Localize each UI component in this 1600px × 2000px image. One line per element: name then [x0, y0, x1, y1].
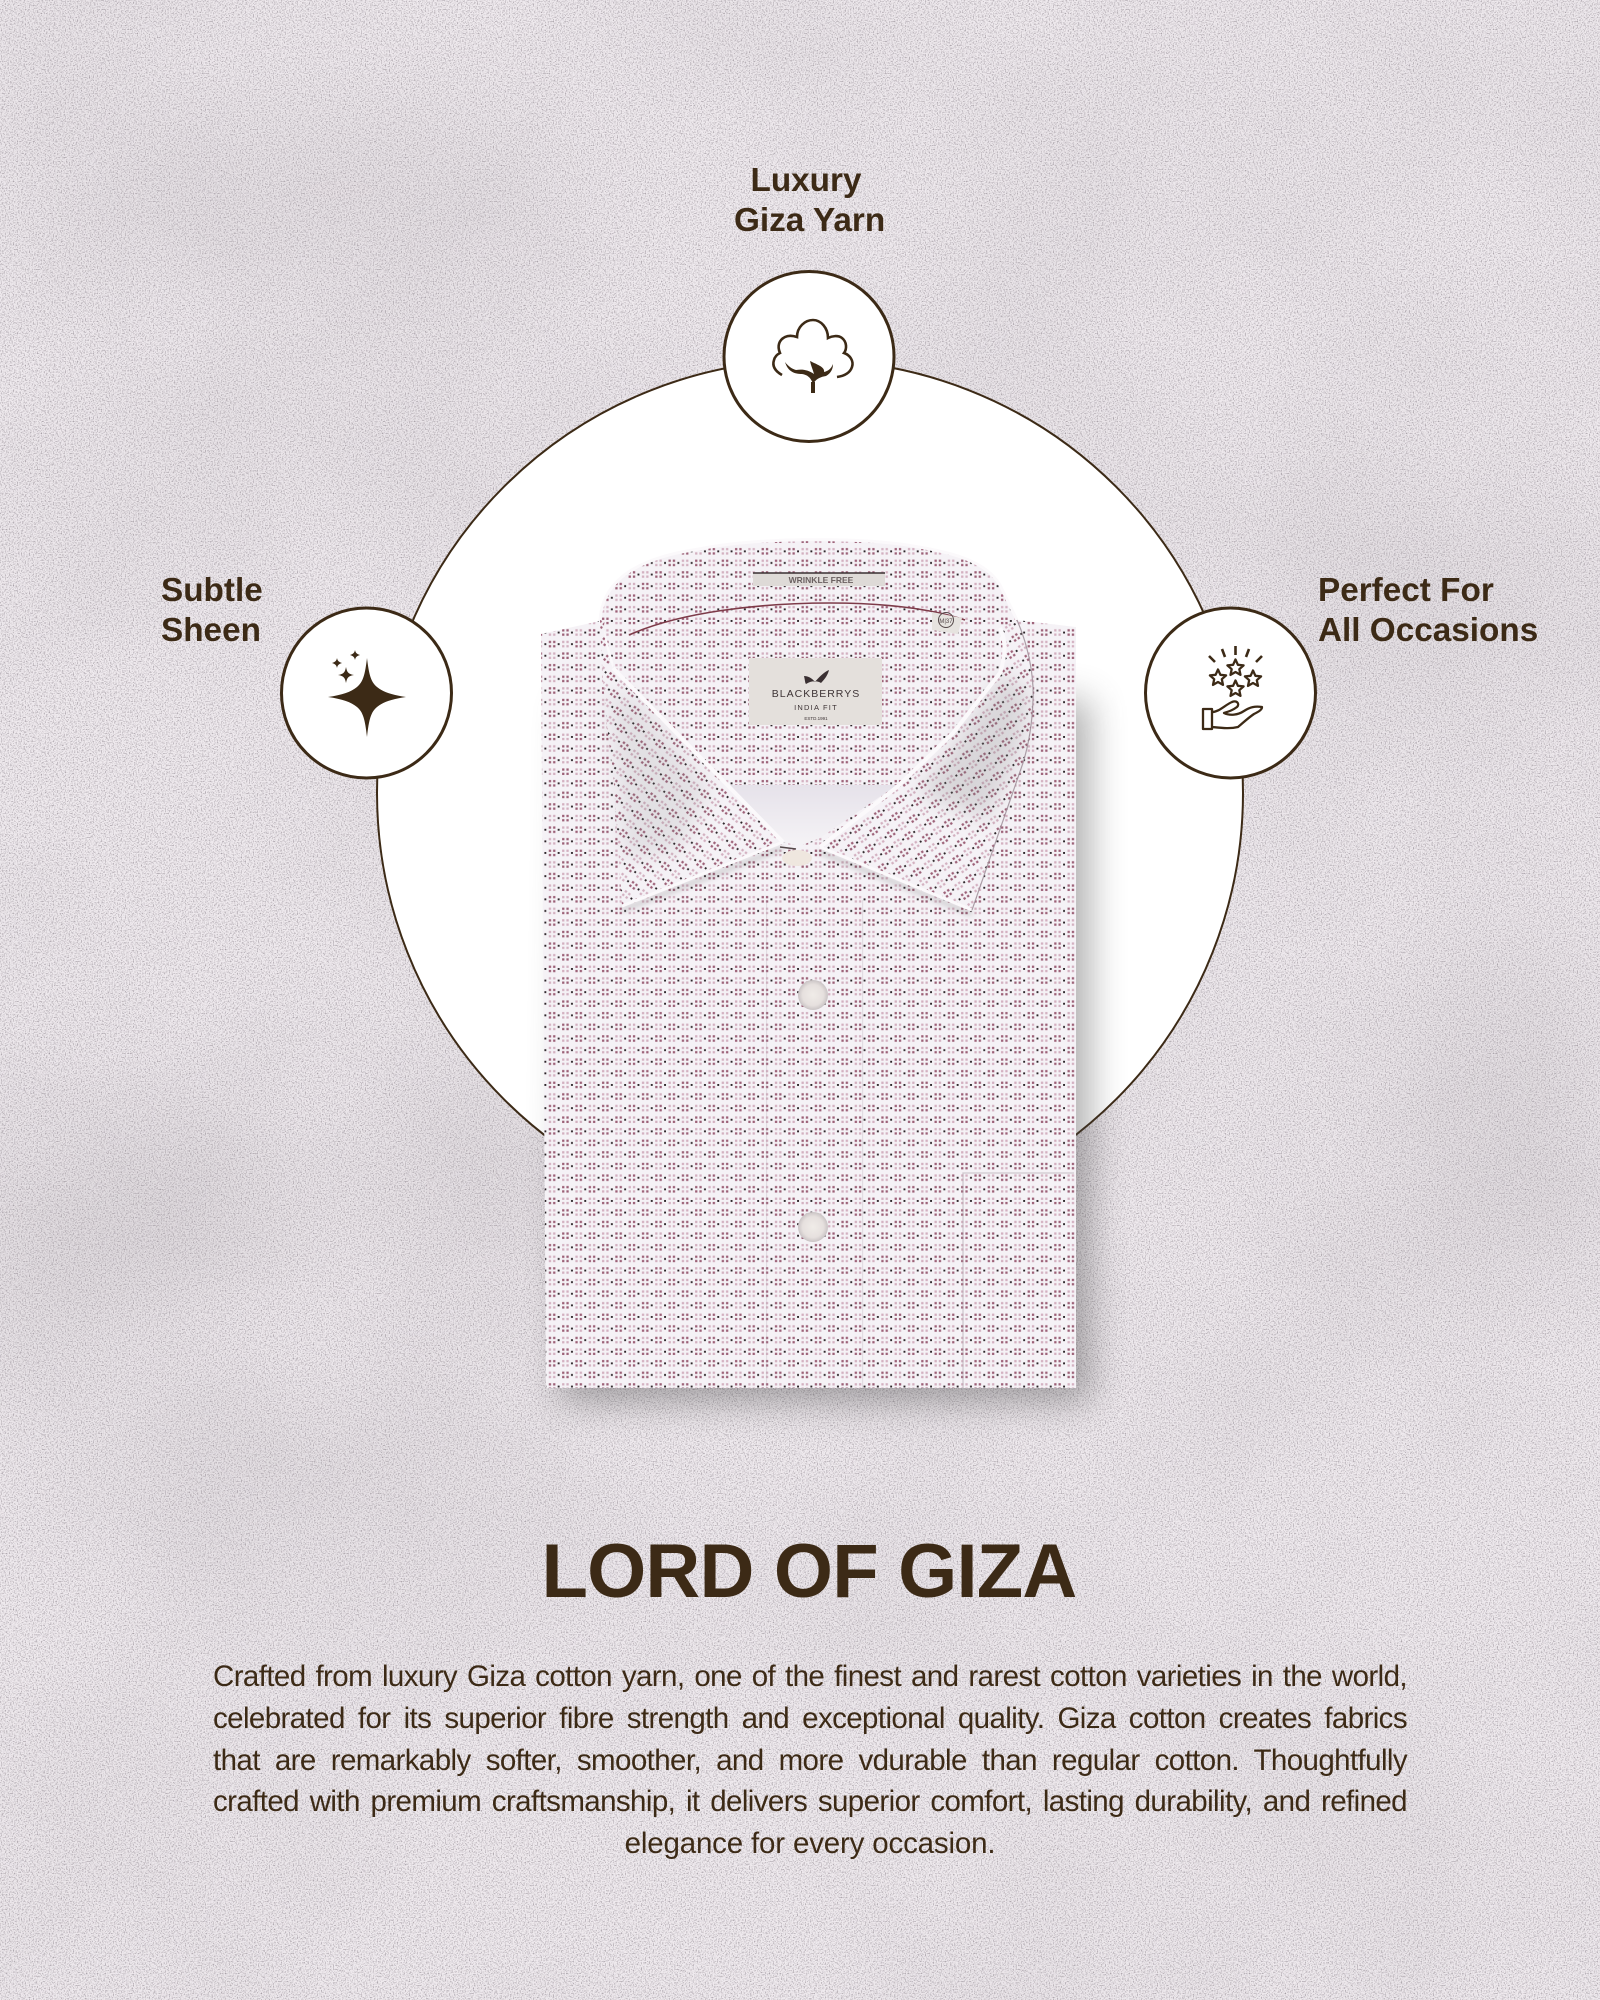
collar stand	[600, 540, 1017, 668]
label: perfect for all occasions: Perfect For	[1318, 572, 1494, 609]
brand label	[749, 658, 882, 725]
left collar flap	[600, 620, 783, 906]
label: subtle sheen	[161, 572, 263, 649]
label: luxury giza yarn: Luxury	[750, 162, 862, 199]
description text: Crafted from luxury Giza cotton yarn, one of the finest and rarest cotton varieties in the world,	[213, 1660, 1407, 1693]
icon: sparkles	[328, 650, 406, 737]
wrinkle free tag: WRINKLE FREE	[789, 575, 854, 585]
shirt buttons	[798, 980, 828, 1242]
collar inner neck	[613, 604, 1004, 842]
title: LORD OF GIZA	[541, 1529, 1077, 1614]
description text: celebrated for its superior fibre strength and exceptional quality. Giza cotton creates fabrics	[213, 1702, 1407, 1735]
shirt pocket	[963, 1173, 1074, 1388]
shirt body	[541, 620, 1076, 1388]
label: luxury giza yarn: Giza Yarn	[734, 202, 885, 239]
icon badge: subtle sheen	[282, 608, 452, 778]
label: perfect for all occasions: All Occasions	[1318, 612, 1538, 649]
icon: cotton boll	[773, 320, 853, 393]
description text: that are remarkably softer, smoother, and more vdurable than regular cotton. Thoughtfully	[213, 1744, 1407, 1777]
collar button	[780, 847, 812, 866]
folded shirt	[541, 540, 1090, 1402]
label: perfect for all occasions	[1318, 572, 1538, 649]
shirt drop shadow	[560, 700, 1090, 1402]
brand label: ESTD.1991	[804, 716, 828, 721]
collar cast shadow on body	[622, 848, 972, 914]
label: luxury giza yarn	[734, 162, 885, 239]
red inner seam	[629, 603, 965, 635]
brand label: INDIA FIT	[794, 703, 838, 712]
brand label: BLACKBERRYS	[772, 688, 860, 700]
size tag: M|37	[939, 619, 953, 625]
description text: elegance for every occasion.	[625, 1827, 995, 1860]
shirt fabric group	[541, 540, 1076, 1388]
wrinkle free tag	[753, 573, 885, 586]
white neck opening	[723, 785, 897, 846]
size tag	[932, 612, 962, 634]
description text: crafted with premium craftsmanship, it delivers superior comfort, lasting durability, and refined	[213, 1785, 1407, 1818]
icon badge: perfect for all occasions	[1146, 608, 1316, 778]
label: subtle sheen: Sheen	[161, 612, 261, 649]
icon: hand with stars	[1203, 646, 1262, 729]
description text	[213, 1660, 1408, 1860]
right collar flap	[820, 620, 1033, 910]
label: subtle sheen: Subtle	[161, 572, 263, 609]
large white circle behind the shirt	[377, 360, 1243, 1226]
icon badge: luxury giza yarn	[724, 272, 894, 442]
